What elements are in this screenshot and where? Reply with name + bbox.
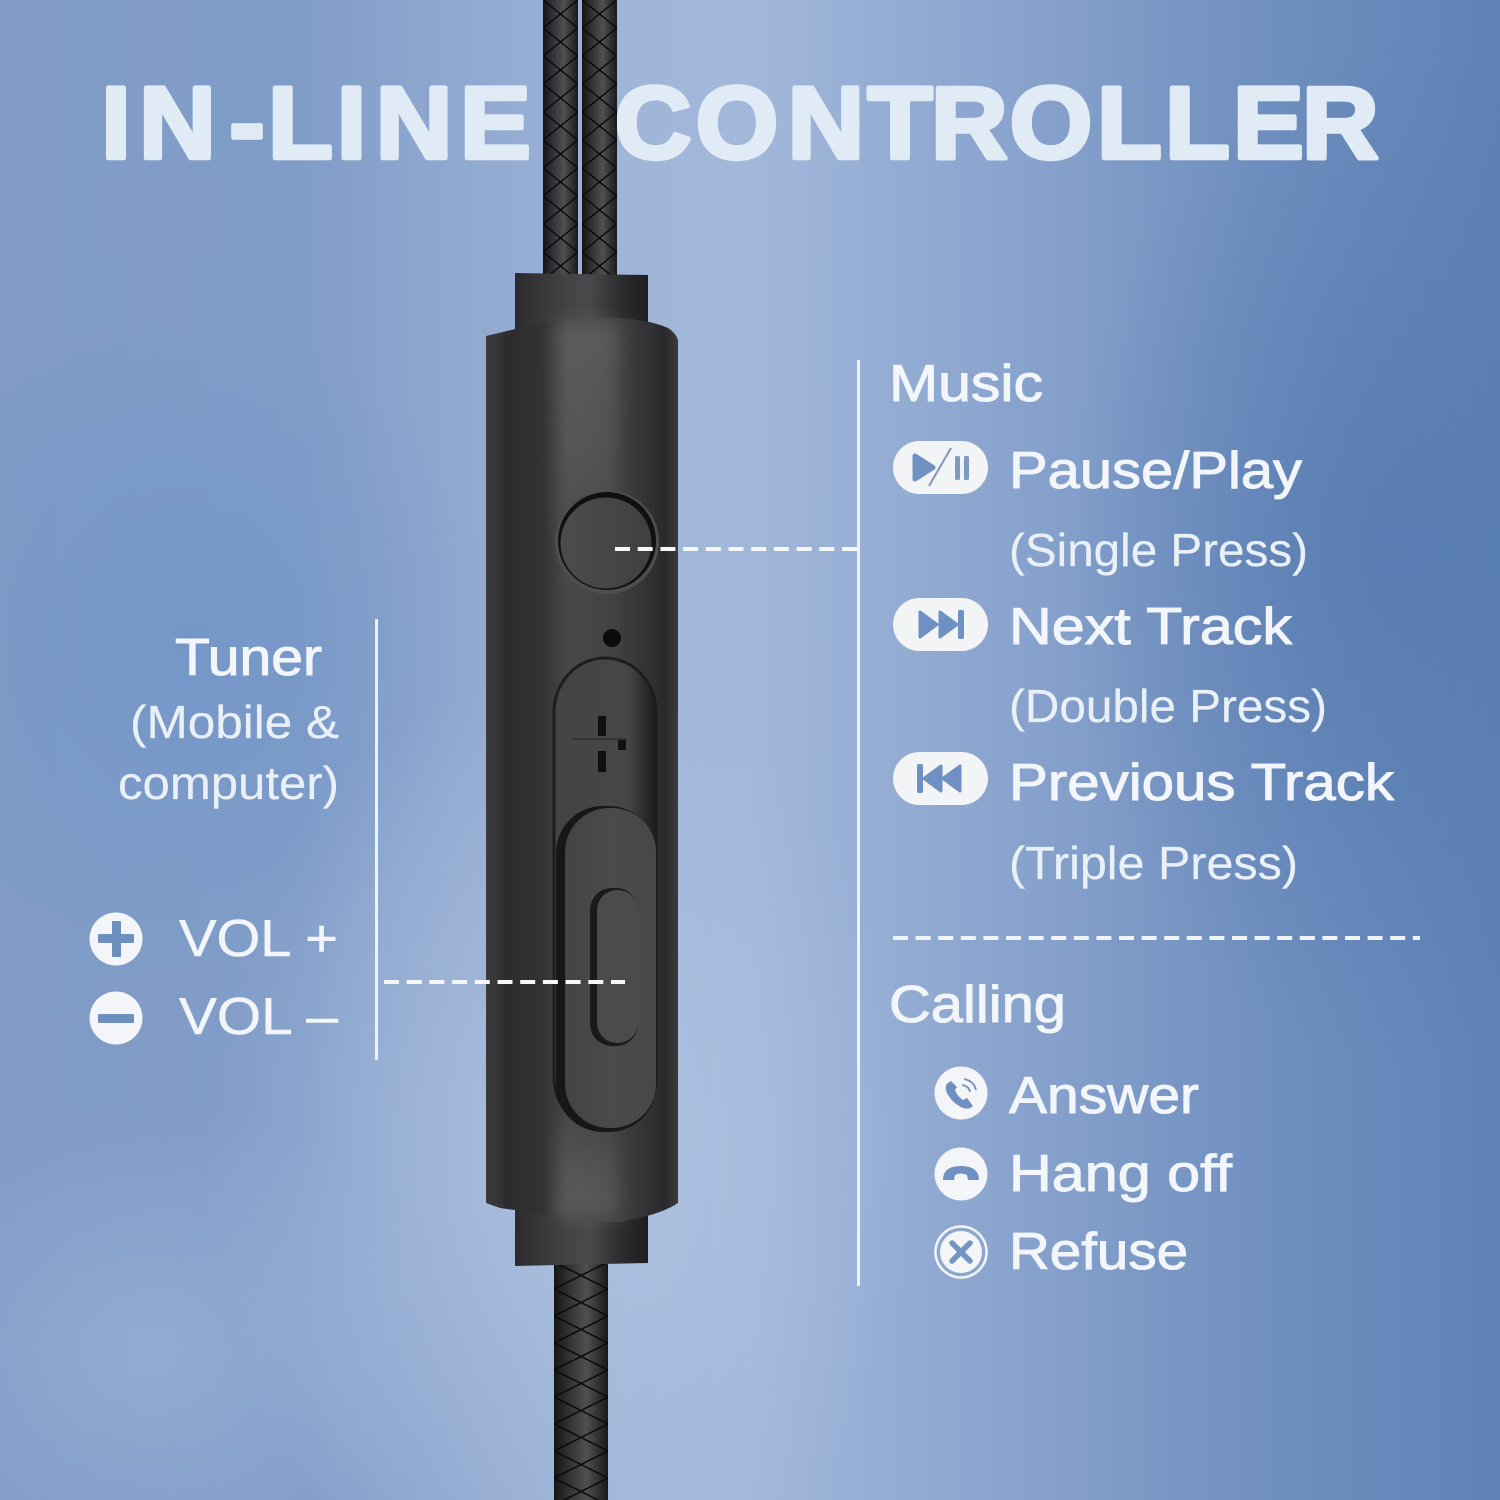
bottom cable bbox=[554, 1262, 608, 1500]
vertical divider right bbox=[857, 360, 860, 1286]
icon: next track bbox=[893, 598, 988, 651]
body left edge bbox=[497, 336, 511, 1204]
section divider bbox=[893, 936, 1420, 940]
label: previous track: Previous Track bbox=[1009, 754, 1395, 812]
icon: previous track bbox=[893, 752, 988, 805]
icon: refuse call bbox=[936, 1226, 986, 1278]
top cables bbox=[543, 0, 617, 280]
controller body bbox=[486, 318, 678, 1222]
heading: calling: Calling bbox=[889, 976, 1066, 1034]
vertical divider left bbox=[375, 619, 378, 1060]
label: pause play: Pause/Play bbox=[1009, 442, 1302, 500]
text: mobile and computer: (Mobile & bbox=[130, 696, 339, 748]
label: refuse: Refuse bbox=[1009, 1223, 1188, 1281]
title: IN-LINE bbox=[101, 67, 531, 181]
label: hang off: Hang off bbox=[1009, 1145, 1233, 1203]
icon: hang off bbox=[934, 1148, 988, 1200]
icon: play pause bbox=[893, 441, 988, 494]
round button bbox=[555, 490, 659, 594]
panel: tuner bbox=[90, 629, 339, 1046]
body highlight bbox=[556, 322, 618, 1218]
icon: volume down bbox=[90, 992, 142, 1044]
title: CONTROLLER bbox=[615, 67, 1379, 181]
label: answer: Answer bbox=[1009, 1067, 1199, 1125]
in-line controller device bbox=[486, 0, 678, 1500]
panel: music bbox=[889, 355, 1395, 889]
leader line to multifunction button bbox=[615, 547, 857, 551]
icon: answer call bbox=[934, 1066, 988, 1120]
bottom collar bbox=[515, 1200, 648, 1266]
volume recess bbox=[554, 658, 656, 1132]
panel: calling bbox=[889, 976, 1233, 1281]
label: next track: Next Track bbox=[1009, 598, 1293, 656]
text: mobile and computer bbox=[118, 696, 339, 809]
label: triple press: (Triple Press) bbox=[1009, 837, 1298, 889]
leader line to volume rocker bbox=[384, 980, 625, 984]
label: single press: (Single Press) bbox=[1009, 524, 1308, 576]
rocker inner pill bbox=[590, 888, 638, 1046]
icon: volume up bbox=[90, 912, 142, 966]
text: mobile and computer: computer) bbox=[118, 757, 339, 809]
title bbox=[101, 67, 1379, 181]
heading: tuner: Tuner bbox=[175, 629, 322, 687]
label: vol minus: VOL – bbox=[179, 988, 338, 1046]
plus mark bbox=[573, 716, 627, 772]
label: vol plus: VOL + bbox=[179, 910, 338, 968]
label: double press: (Double Press) bbox=[1009, 680, 1327, 732]
microphone hole bbox=[603, 629, 621, 647]
top collar bbox=[515, 273, 648, 335]
heading: music: Music bbox=[889, 355, 1043, 413]
volume rocker bbox=[565, 808, 656, 1128]
